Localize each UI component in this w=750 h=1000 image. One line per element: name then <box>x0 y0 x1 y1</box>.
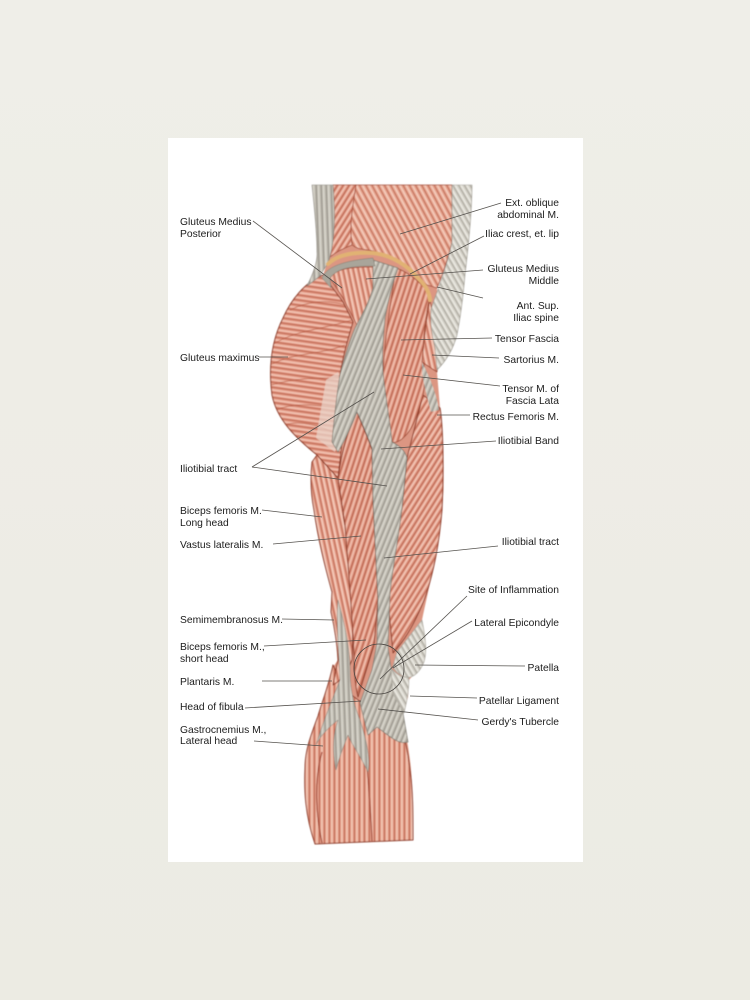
labels: right column: Site of Inflammation <box>468 585 559 596</box>
labels: left column <box>180 217 283 747</box>
labels: left column: Biceps femoris M., <box>180 642 265 653</box>
muscle: vastus lateralis <box>338 412 378 697</box>
labels: right column: Ant. Sup. <box>517 301 559 312</box>
tendon: rectus femoris strip <box>422 362 439 412</box>
labels: left column: Iliotibial tract <box>180 464 237 475</box>
labels: left column: Plantaris M. <box>180 677 234 688</box>
muscle: upper left oblique <box>330 185 356 257</box>
labels: right column: Iliotibial Band <box>498 436 559 447</box>
labels: left column: Head of fibula <box>180 702 244 713</box>
labels: right column: Iliac spine <box>513 313 559 324</box>
labels: right column: abdominal M. <box>497 210 559 221</box>
labels: left column: Gastrocnemius M., <box>180 725 266 736</box>
labels: left column: Gluteus maximus <box>180 353 260 364</box>
labels: right column: Middle <box>529 276 559 287</box>
bone: iliac crest <box>328 253 430 300</box>
muscle: thigh left biceps femoris <box>311 455 353 685</box>
labels: left column: Lateral head <box>180 736 238 747</box>
circle: site of inflammation <box>354 644 404 694</box>
labels: left column: Vastus lateralis M. <box>180 540 263 551</box>
bone: patella <box>393 620 426 678</box>
muscle: sartorius <box>422 300 440 372</box>
labels: right column: Fascia Lata <box>506 396 559 407</box>
silhouette underlay <box>270 243 444 844</box>
labels: right column: Tensor Fascia <box>495 334 559 345</box>
labels: right column: Gerdy's Tubercle <box>481 717 559 728</box>
labels: left column: short head <box>180 654 229 665</box>
anatomical leg illustration <box>270 185 472 844</box>
labels: right column: Tensor M. of <box>502 384 559 395</box>
fascia patch on gluteus <box>316 372 345 452</box>
labels: left column: Gluteus Medius <box>180 217 252 228</box>
muscle: external oblique <box>351 185 452 288</box>
labels: right column: Patellar Ligament <box>479 696 559 707</box>
labels: right column: Lateral Epicondyle <box>474 618 559 629</box>
leader lines <box>245 203 525 746</box>
labels: left column: Semimembranosus M. <box>180 615 283 626</box>
labels: right column: Iliotibial tract <box>502 537 559 548</box>
labels: right column <box>468 198 559 728</box>
white print panel <box>168 138 583 862</box>
labels: right column: Patella <box>528 663 559 674</box>
tendon: biceps femoris and lower fascia <box>316 600 369 772</box>
tendon: crest fascia strip <box>322 258 375 288</box>
muscle: calf dividing lines <box>317 752 372 843</box>
muscle: gluteus medius <box>330 267 377 325</box>
labels: right column: Gluteus Medius <box>487 264 559 275</box>
tendon: iliotibial band <box>332 260 408 743</box>
tendon: right gray fascia band <box>431 185 472 370</box>
labels: right column: Sartorius M. <box>503 355 559 366</box>
muscle: lower leg calf <box>305 665 413 844</box>
muscle: gluteus maximus <box>270 275 353 478</box>
labels: left column: Biceps femoris M. <box>180 506 262 517</box>
labels: left column: Posterior <box>180 229 222 240</box>
tendon: left gray fascia band <box>307 185 334 286</box>
labels: left column: Long head <box>180 518 229 529</box>
tendon: patellar ligament <box>391 668 409 713</box>
muscle: tensor fasciae latae <box>383 268 430 442</box>
labels: right column: Ext. oblique <box>505 198 559 209</box>
labels: right column: Iliac crest, et. lip <box>485 229 559 240</box>
muscle: vastus right of thigh <box>388 395 443 653</box>
labels: right column: Rectus Femoris M. <box>473 412 559 423</box>
